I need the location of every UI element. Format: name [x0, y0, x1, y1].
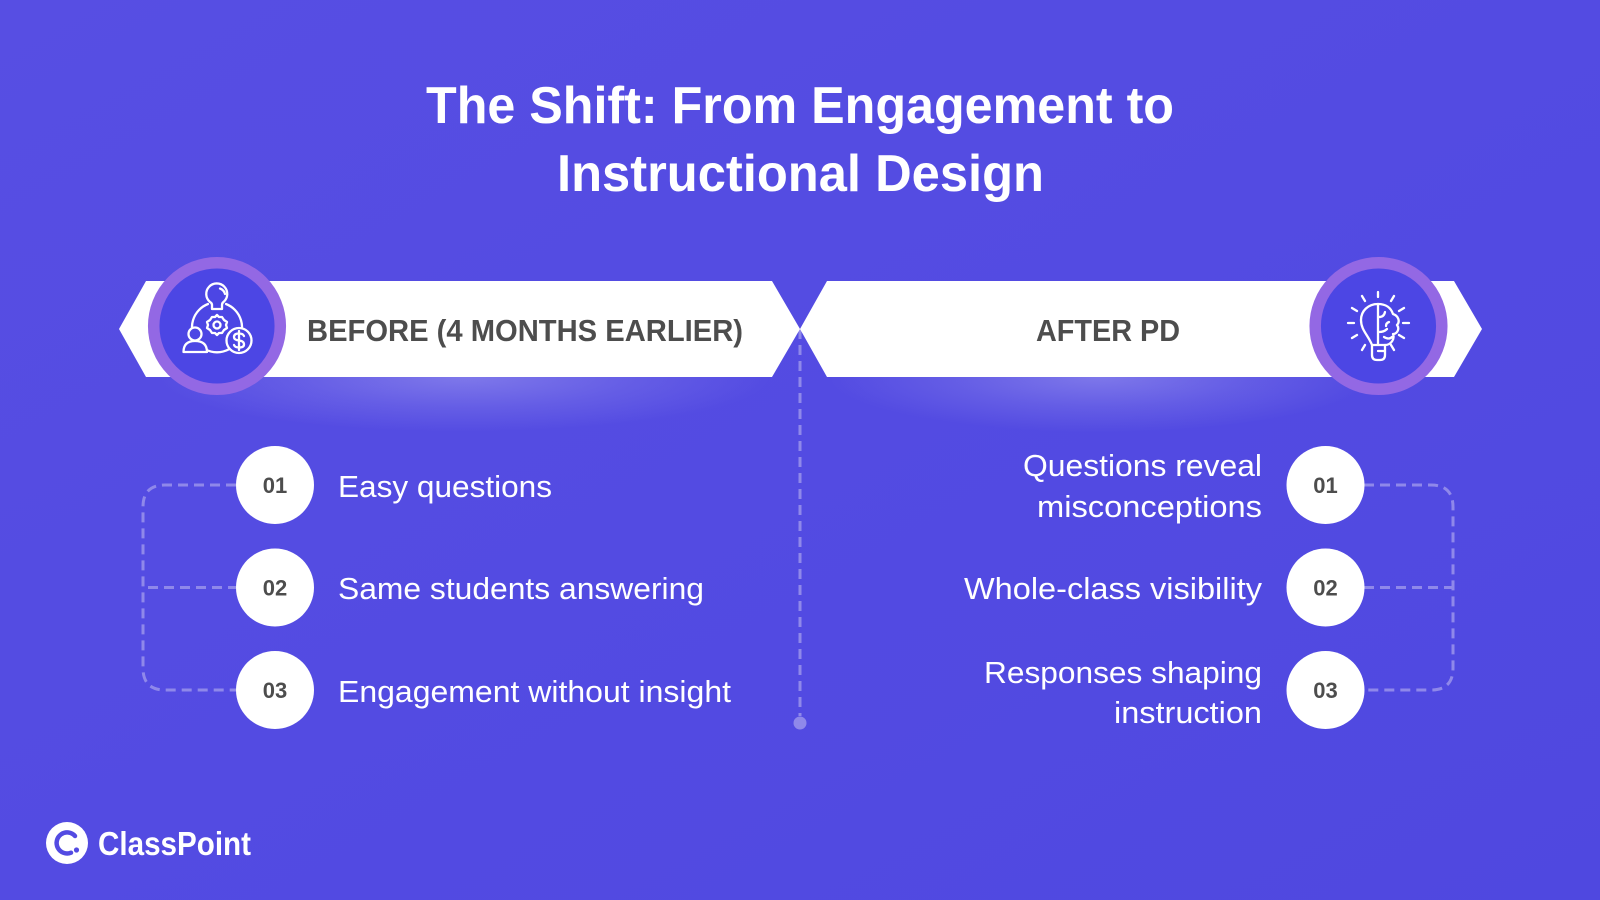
logo: ClassPoint: ClassPoint [98, 825, 251, 862]
icon: lightbulb brain [1315, 263, 1442, 389]
center divider [794, 329, 806, 730]
heading: AFTER PD [1036, 313, 1180, 348]
item 03: 03 [263, 678, 287, 703]
item 01 [236, 446, 552, 524]
heading: BEFORE (4 MONTHS EARLIER) [307, 313, 743, 348]
item 02: 02 [263, 576, 287, 600]
panel: before [119, 263, 800, 487]
item 03: Responses shaping [984, 655, 1262, 690]
title: Instructional Design [557, 145, 1044, 203]
banner glow [830, 377, 1370, 487]
title [426, 77, 1174, 203]
item 03: 03 [1313, 678, 1338, 703]
item 02 [964, 548, 1364, 626]
title: The Shift: From Engagement to [426, 77, 1174, 135]
banner [119, 281, 800, 377]
panel: after [800, 263, 1482, 487]
banner glow [160, 377, 770, 487]
item 02 [236, 548, 704, 626]
item 01: Questions reveal [1023, 448, 1262, 483]
item 01: 01 [263, 473, 287, 498]
item 02: Same students answering [338, 571, 704, 606]
item 03: instruction [1114, 695, 1262, 730]
logo: ClassPoint [46, 822, 251, 864]
list: after [964, 446, 1364, 730]
list: before [236, 446, 731, 729]
item 03 [984, 651, 1364, 730]
item 03: Engagement without insight [338, 674, 731, 709]
item 01 [1023, 446, 1364, 524]
item 03 [236, 651, 731, 729]
item 01: 01 [1313, 473, 1338, 498]
connector: before list [143, 485, 236, 690]
item 02: Whole-class visibility [964, 571, 1263, 606]
item 01: misconceptions [1037, 489, 1262, 524]
banner [800, 281, 1482, 377]
item 01: Easy questions [338, 469, 552, 504]
icon: people, gear and money [154, 263, 280, 389]
item 02: 02 [1313, 576, 1338, 600]
connector: after list [1364, 485, 1453, 690]
